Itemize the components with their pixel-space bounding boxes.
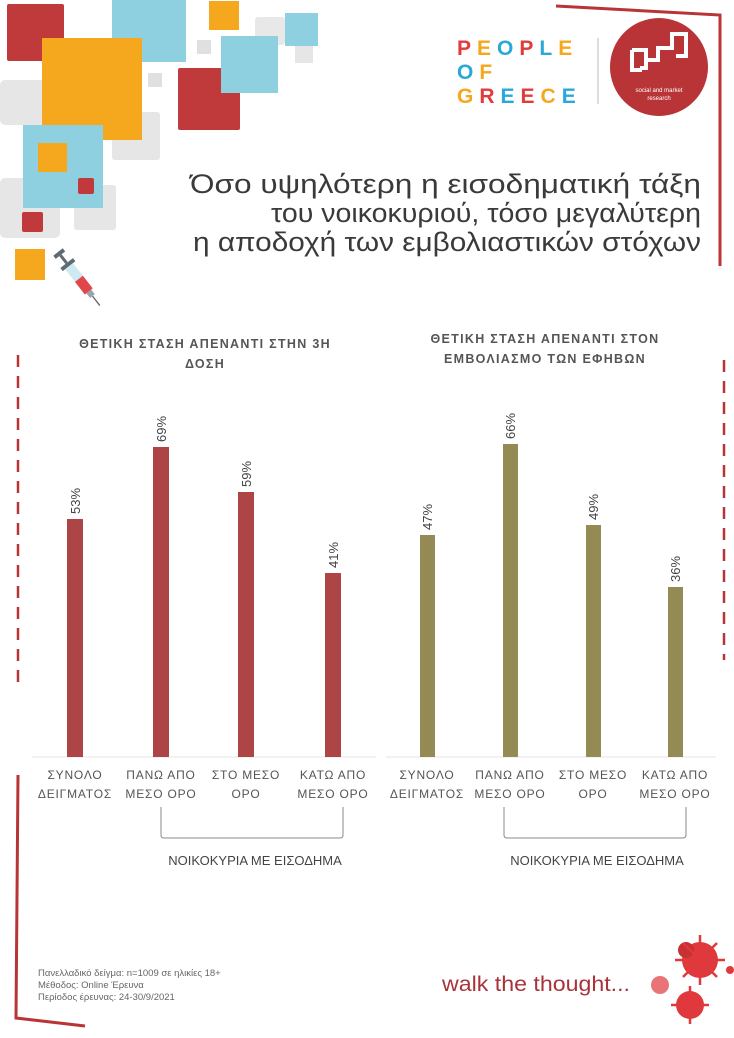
logo: people of greece: GREECE — [457, 85, 582, 108]
bar chart: teens: ΜΕΣΟ ΟΡΟ — [639, 787, 711, 801]
footnote: Μέθοδος: Online Έρευνα — [38, 980, 144, 991]
bar chart: teens — [386, 413, 716, 868]
bar chart: 3rd dose: ΜΕΣΟ ΟΡΟ — [297, 787, 369, 801]
bar chart: teens: ΣΥΝΟΛΟ — [399, 768, 455, 782]
bar chart: 3rd dose: ΟΡΟ — [231, 787, 261, 801]
bar chart: 3rd dose: 41% — [326, 542, 341, 568]
bar chart: teens: 36% — [668, 556, 683, 582]
bar chart: 3rd dose: 53% — [68, 488, 83, 514]
footnote: Πανελλαδικό δείγμα: n=1009 σε ηλικίες 18+ — [38, 968, 221, 979]
bar chart: 3rd dose: ΣΥΝΟΛΟ — [47, 768, 103, 782]
slogan: walk the thought... — [441, 973, 630, 996]
bar chart: teens: ΟΡΟ — [578, 787, 608, 801]
bar chart: teens: ΜΕΣΟ ΟΡΟ — [474, 787, 546, 801]
chart heading: 3rd dose: ΘΕΤΙΚΗ ΣΤΑΣΗ ΑΠΕΝΑΝΤΙ ΣΤΗΝ 3Η — [79, 337, 331, 351]
bar chart: teens: ΔΕΙΓΜΑΤΟΣ — [390, 787, 464, 801]
title: η αποδοχή των εμβολιαστικών στόχων — [193, 227, 701, 257]
logo: people of greece: OF — [457, 61, 498, 84]
logo: social and market research: research — [647, 96, 671, 102]
icon: viruses — [651, 935, 734, 1024]
bar chart: teens: ΣΤΟ ΜΕΣΟ — [559, 768, 627, 782]
bar chart: 3rd dose — [32, 416, 376, 868]
title: του νοικοκυριού, τόσο μεγαλύτερη — [271, 198, 701, 228]
footnote — [38, 968, 221, 1003]
bar chart: 3rd dose: ΠΑΝΩ ΑΠΟ — [126, 768, 196, 782]
bar chart: 3rd dose: ΚΑΤΩ ΑΠΟ — [300, 768, 366, 782]
title — [189, 169, 701, 257]
bar chart: teens: 66% — [503, 413, 518, 439]
bar chart: 3rd dose: ΔΕΙΓΜΑΤΟΣ — [38, 787, 112, 801]
bar chart: teens: ΝΟΙΚΟΚΥΡΙΑ ΜΕ ΕΙΣΟΔΗΜΑ — [510, 853, 684, 868]
logo: people of greece — [457, 37, 582, 108]
chart heading: 3rd dose: ΔΟΣΗ — [185, 357, 225, 371]
bar chart: 3rd dose: 69% — [154, 416, 169, 442]
icon: syringe — [52, 247, 106, 311]
logo: people of greece: PEOPLE — [457, 37, 578, 60]
decorative squares — [0, 0, 318, 280]
bar chart: teens: 47% — [420, 504, 435, 530]
bar chart: 3rd dose: ΝΟΙΚΟΚΥΡΙΑ ΜΕ ΕΙΣΟΔΗΜΑ — [168, 853, 342, 868]
bar chart: 3rd dose: 59% — [239, 461, 254, 487]
chart heading: teens: ΕΜΒΟΛΙΑΣΜΟ ΤΩΝ ΕΦΗΒΩΝ — [444, 352, 646, 366]
bar chart: 3rd dose: ΜΕΣΟ ΟΡΟ — [125, 787, 197, 801]
title: Όσο υψηλότερη η εισοδηματική τάξη — [189, 169, 701, 199]
footnote: Περίοδος έρευνας: 24-30/9/2021 — [38, 992, 175, 1003]
chart heading: teens: ΘΕΤΙΚΗ ΣΤΑΣΗ ΑΠΕΝΑΝΤΙ ΣΤΟΝ — [431, 332, 659, 346]
chart heading: 3rd dose — [79, 337, 331, 371]
logo: social and market research: social and market — [635, 88, 683, 94]
logo: social and market research — [610, 18, 708, 116]
bar chart: teens: ΚΑΤΩ ΑΠΟ — [642, 768, 708, 782]
bar chart: teens: ΠΑΝΩ ΑΠΟ — [475, 768, 545, 782]
chart heading: teens — [431, 332, 659, 366]
bar chart: 3rd dose: ΣΤΟ ΜΕΣΟ — [212, 768, 280, 782]
bar chart: teens: 49% — [586, 494, 601, 520]
